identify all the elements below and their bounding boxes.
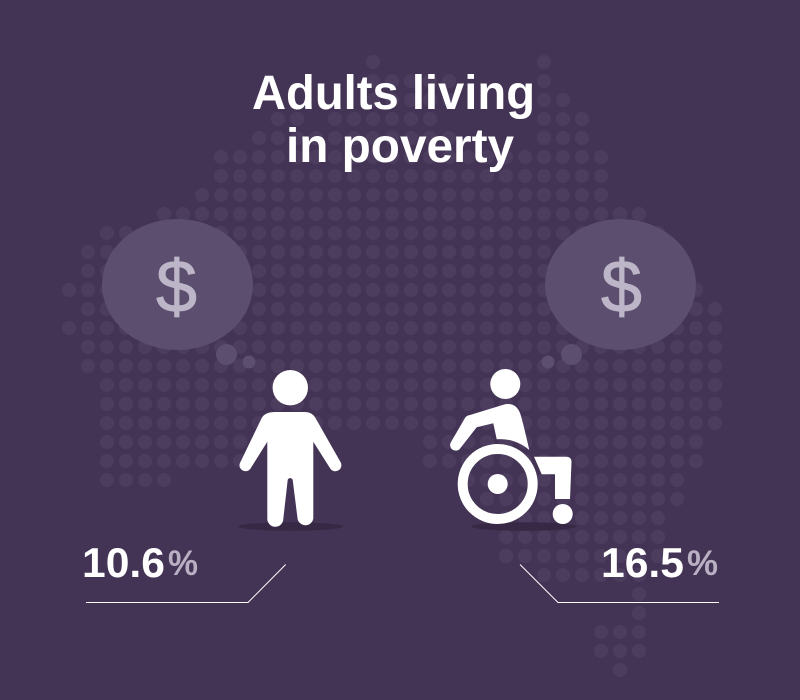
thought bubble: adults with disability: $ (601, 245, 642, 328)
stat: 16.5% (601, 539, 718, 586)
callout line right (520, 564, 719, 602)
icon: person in wheelchair (450, 369, 576, 531)
title: Adults living (252, 67, 535, 120)
title: in poverty (286, 120, 514, 173)
stat: 16.5%: % (687, 544, 718, 583)
callout line left (86, 564, 286, 602)
dotted map of Australia (60, 52, 724, 680)
thought bubble: adults without disability: $ (156, 245, 197, 328)
stat: 16.5%: 16.5 (601, 539, 684, 586)
icon: standing person (238, 370, 343, 531)
thought bubble: adults with disability (542, 219, 696, 368)
thought bubble: adults without disability (102, 219, 256, 368)
stat: 10.6%: % (168, 544, 198, 583)
stat: 10.6%: 10.6 (82, 539, 165, 586)
title (252, 67, 535, 173)
